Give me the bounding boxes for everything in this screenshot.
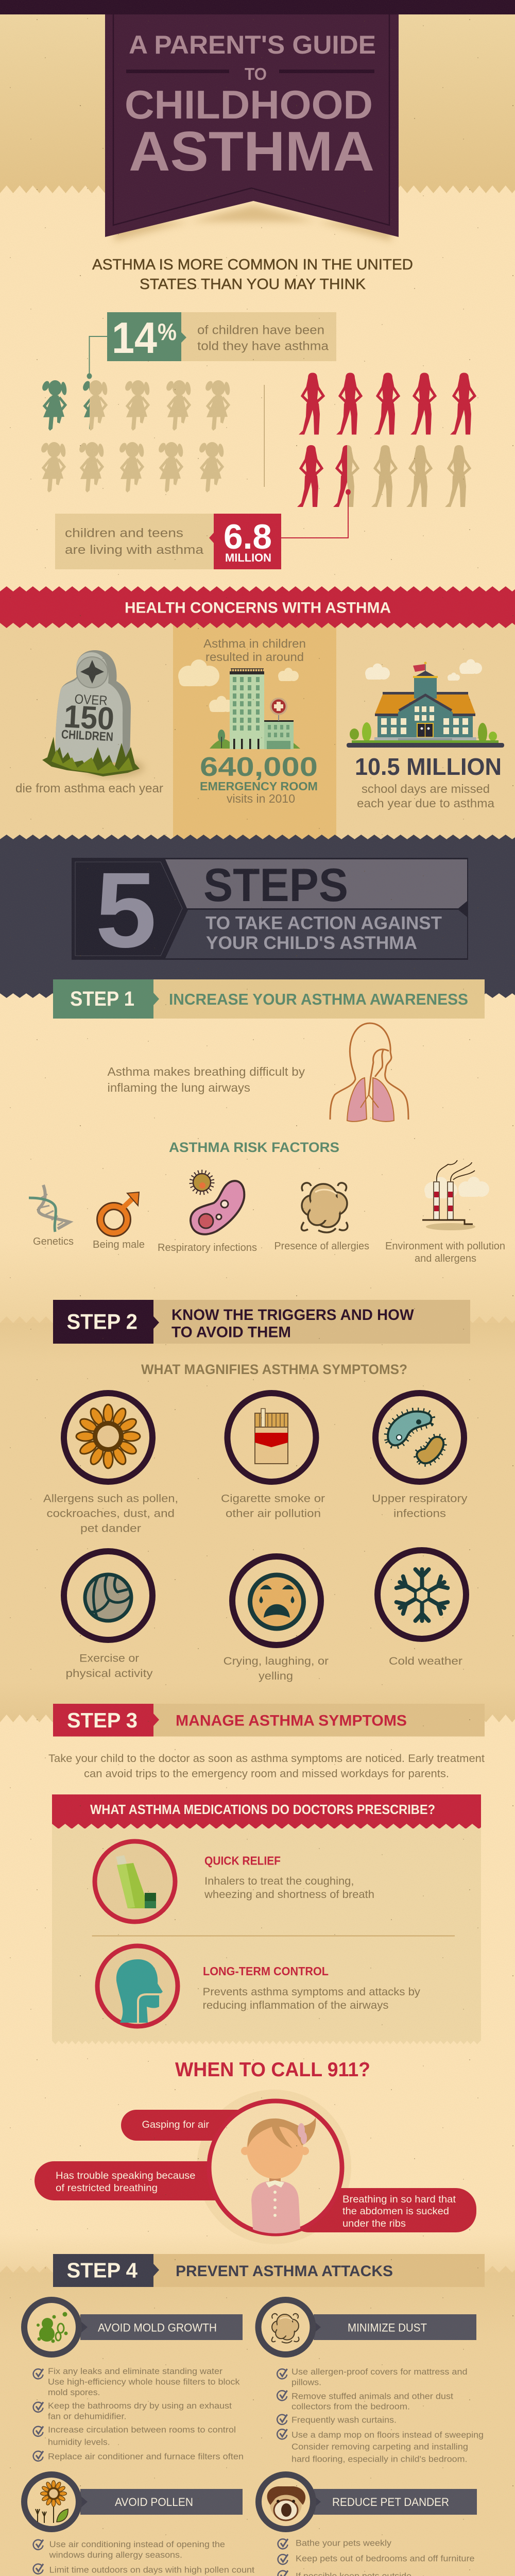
trigger: cold weather: Cold weather <box>389 1655 462 1667</box>
medication: quick relief <box>204 1854 374 1901</box>
step 2 header: TO AVOID THEM <box>171 1324 291 1341</box>
tip: avoid pollen: AVOID POLLEN <box>115 2496 193 2509</box>
panel: emergency room stat <box>178 637 318 805</box>
tip: minimize dust: Use allergen-proof covers for mattress and <box>291 2367 468 2377</box>
text: asthma definition <box>107 1065 305 1094</box>
tip: avoid mold growth: humidity levels. <box>48 2438 110 2447</box>
panel: 5 steps heading: 5 <box>95 851 157 970</box>
medication: long-term control: LONG-TERM CONTROL <box>203 1964 329 1978</box>
step 3 header: MANAGE ASTHMA SYMPTOMS <box>176 1713 407 1729</box>
tip: reduce pet dander: Keep pets out of bedrooms and off furniture <box>296 2554 475 2564</box>
risk factor: pollution: Environment with pollution <box>385 1241 505 1252</box>
tip: avoid mold growth: mold spores. <box>48 2388 100 2397</box>
panel: 5 steps heading <box>72 851 468 970</box>
trigger: exercise: Exercise or <box>79 1653 139 1664</box>
figure: when to call 911: Gasping for air <box>142 2119 210 2130</box>
heading: when to call 911: WHEN TO CALL 911? <box>175 2059 370 2081</box>
intro heading: ASTHMA IS MORE COMMON IN THE UNITED <box>92 257 413 273</box>
banner: health concerns: HEALTH CONCERNS WITH ASTHMA <box>125 600 391 616</box>
tip: avoid pollen: windows during allergy seasons. <box>49 2550 182 2560</box>
tip: avoid pollen <box>24 2475 254 2576</box>
risk factor: pollution <box>385 1160 505 1264</box>
text: asthma definition: Asthma makes breathing difficult by <box>107 1065 305 1078</box>
medication: long-term control <box>203 1964 421 2011</box>
icon: inhaler <box>95 1841 175 1922</box>
tip: avoid mold growth: Use high-efficiency whole house filters to block <box>48 2377 240 2386</box>
trigger: allergens <box>43 1393 178 1534</box>
stat callout: 6.8 million: 6.8 <box>224 517 272 556</box>
figure: when to call 911 <box>35 2090 476 2244</box>
text: take child to the doctor: Take your child to the doctor as soon as asthma symptoms are noticed. Early treatment <box>48 1753 485 1765</box>
step 4 header <box>53 2254 485 2287</box>
tip: minimize dust: collectors from the bedroom. <box>291 2402 410 2411</box>
panel: emergency room stat: EMERGENCY ROOM <box>200 779 318 793</box>
stat callout: 6.8 million: are living with asthma <box>65 543 204 557</box>
intro heading: STATES THAN YOU MAY THINK <box>140 276 366 293</box>
stat callout: 14 percent <box>87 312 336 379</box>
panel: 5 steps heading: STEPS <box>203 859 348 911</box>
tip: minimize dust: Remove stuffed animals and other dust <box>291 2392 453 2401</box>
panel: tombstone stat <box>15 650 163 795</box>
stat callout: 6.8 million: MILLION <box>225 551 271 564</box>
tip: avoid mold growth: Replace air conditioner and furnace filters often <box>48 2452 244 2462</box>
risk factor: allergies: Presence of allergies <box>274 1241 369 1252</box>
step 4 header: STEP 4 <box>67 2259 138 2282</box>
text: take child to the doctor: can avoid trips to the emergency room and missed workdays for parents. <box>84 1768 449 1780</box>
trigger: cigarette smoke: Cigarette smoke or <box>221 1493 325 1504</box>
step 2 header <box>53 1300 470 1344</box>
panel: tombstone stat: die from asthma each year <box>15 782 163 795</box>
tip: avoid mold growth: fan or dehumidifier. <box>48 2412 127 2421</box>
step 4 header: PREVENT ASTHMA ATTACKS <box>176 2263 393 2280</box>
step 1 header: STEP 1 <box>70 988 134 1010</box>
top bar <box>0 0 515 14</box>
tip: minimize dust: Frequently wash curtains. <box>291 2415 397 2425</box>
risk factor: allergies <box>274 1183 369 1252</box>
title line: a parent's guide: A PARENT'S GUIDE <box>129 30 376 59</box>
pictogram: teen silhouettes <box>297 373 475 507</box>
trigger: cold weather <box>377 1550 466 1667</box>
trigger: respiratory infections: infections <box>393 1507 446 1520</box>
title line: childhood: CHILDHOOD <box>125 82 373 127</box>
risk factor: being male: Being male <box>93 1239 145 1250</box>
tip: avoid mold growth: Fix any leaks and eliminate standing water <box>48 2367 223 2376</box>
trigger: respiratory infections <box>372 1393 468 1520</box>
figure: when to call 911: the abdomen is sucked <box>342 2206 449 2217</box>
callout: breathing in so hard <box>288 2188 476 2232</box>
step 3 header: STEP 3 <box>67 1708 138 1732</box>
stat callout: 14 percent: % <box>158 318 177 345</box>
stat callout: 14 percent: 14 <box>112 314 157 363</box>
heading: what magnifies asthma symptoms: WHAT MAGNIFIES ASTHMA SYMPTOMS? <box>141 1362 407 1377</box>
medication: quick relief: wheezing and shortness of breath <box>204 1889 374 1901</box>
trigger: crying laughing yelling <box>224 1556 329 1682</box>
step 2 header: KNOW THE TRIGGERS AND HOW <box>171 1307 414 1324</box>
trigger: cigarette smoke <box>221 1393 325 1520</box>
heading: medications: WHAT ASTHMA MEDICATIONS DO DOCTORS PRESCRIBE? <box>90 1802 435 1817</box>
figure: when to call 911: Has trouble speaking because <box>56 2170 196 2181</box>
icon: school <box>347 659 504 748</box>
banner: health concerns <box>0 586 515 628</box>
figure: when to call 911: under the ribs <box>342 2218 406 2229</box>
step 3 header <box>53 1704 485 1736</box>
tip: minimize dust: MINIMIZE DUST <box>348 2321 427 2334</box>
step 1 header: INCREASE YOUR ASTHMA AWARENESS <box>169 990 468 1008</box>
illustration: girl <box>241 2117 316 2239</box>
medication: long-term control: Prevents asthma symptoms and attacks by <box>203 1986 421 1998</box>
risk factor: genetics <box>29 1185 74 1247</box>
panel: tombstone stat: CHILDREN <box>61 727 114 744</box>
medication: long-term control: reducing inflammation of the airways <box>203 1999 388 2011</box>
risk factor: respiratory infections <box>158 1172 257 1253</box>
trigger: crying laughing yelling: yelling <box>259 1670 293 1682</box>
panel: tombstone stat: OVER <box>74 691 108 708</box>
tip: avoid pollen: Use air conditioning instead of opening the <box>49 2540 225 2549</box>
trigger: crying laughing yelling: Crying, laughing, or <box>224 1655 329 1667</box>
figure: when to call 911: of restricted breathing <box>56 2182 158 2194</box>
panel: missed school days stat: each year due to asthma <box>357 796 494 810</box>
panel: asthma medications <box>52 1794 481 2044</box>
tip: avoid mold growth <box>24 2300 244 2462</box>
icon: airway <box>97 1946 178 2026</box>
panel: 5 steps heading: TO TAKE ACTION AGAINST <box>205 913 442 934</box>
figure: when to call 911: Breathing in so hard that <box>342 2194 456 2205</box>
tip: minimize dust: Use a damp mop on floors instead of sweeping <box>291 2431 484 2440</box>
medication: quick relief: QUICK RELIEF <box>204 1854 281 1867</box>
title line: asthma: ASTHMA <box>129 120 374 183</box>
trigger: cigarette smoke: other air pollution <box>226 1507 321 1520</box>
tip: reduce pet dander: Bathe your pets weekly <box>296 2539 392 2548</box>
trigger: allergens: Allergens such as pollen, <box>43 1493 178 1504</box>
panel: emergency room stat: visits in 2010 <box>227 792 295 805</box>
trigger: respiratory infections: Upper respiratory <box>372 1493 468 1504</box>
panel: emergency room column background <box>173 623 336 840</box>
tip: avoid mold growth: Increase circulation between rooms to control <box>48 2426 236 2435</box>
stat callout: 6.8 million <box>55 489 351 569</box>
icon: hospital <box>178 659 300 749</box>
icon: body with lungs <box>330 1023 408 1122</box>
risk factor: being male <box>93 1192 145 1250</box>
trigger: allergens: cockroaches, dust, and <box>46 1507 175 1520</box>
tip: avoid pollen: Limit time outdoors on days with high pollen count <box>49 2566 254 2575</box>
text: take child to the doctor <box>48 1753 485 1780</box>
panel: missed school days stat: school days are missed <box>362 782 490 795</box>
tip: avoid mold growth: Keep the bathrooms dry by using an exhaust <box>48 2401 232 2411</box>
panel: emergency room stat: resulted in around <box>205 650 304 664</box>
panel: emergency room stat: Asthma in children <box>203 637 306 650</box>
stat callout: 14 percent: told they have asthma <box>197 339 329 353</box>
trigger: exercise <box>64 1551 153 1680</box>
heading: asthma risk factors: ASTHMA RISK FACTORS <box>169 1140 339 1155</box>
panel: tombstone stat: 150 <box>63 699 115 737</box>
panel: missed school days stat: 10.5 MILLION <box>355 753 502 780</box>
stat callout: 6.8 million: children and teens <box>65 527 183 540</box>
tip: reduce pet dander <box>259 2475 477 2576</box>
step 2 header: STEP 2 <box>67 1309 138 1333</box>
tip: reduce pet dander: REDUCE PET DANDER <box>332 2496 449 2509</box>
callout: trouble speaking <box>35 2161 241 2200</box>
callout: gasping for air <box>121 2110 255 2141</box>
medication: quick relief: Inhalers to treat the coughing, <box>204 1875 354 1887</box>
step 1 header <box>53 979 485 1019</box>
tip: minimize dust: Consider removing carpeting and installing <box>291 2442 468 2451</box>
panel: 5 steps heading: YOUR CHILD'S ASTHMA <box>206 933 417 953</box>
trigger: exercise: physical activity <box>66 1668 153 1680</box>
panel: missed school days stat <box>347 659 504 810</box>
pictogram: children silhouettes <box>40 380 231 493</box>
intro heading <box>92 257 413 293</box>
tip: minimize dust <box>259 2300 484 2464</box>
text: asthma definition: inflaming the lung airways <box>107 1081 250 1094</box>
risk factor: pollution: and allergens <box>415 1253 476 1264</box>
trigger: allergens: pet dander <box>80 1523 141 1534</box>
title ribbon <box>105 14 399 241</box>
tip: avoid mold growth: AVOID MOLD GROWTH <box>98 2321 217 2334</box>
risk factor: respiratory infections: Respiratory infections <box>158 1242 257 1253</box>
tip: minimize dust: pillows. <box>291 2378 321 2387</box>
stat callout: 14 percent: of children have been <box>197 324 324 337</box>
risk factor: genetics: Genetics <box>33 1236 74 1247</box>
tip: minimize dust: hard flooring, especially in child's bedroom. <box>291 2454 468 2464</box>
title line: to: TO <box>245 64 267 83</box>
panel: emergency room stat: 640,000 <box>200 752 318 782</box>
